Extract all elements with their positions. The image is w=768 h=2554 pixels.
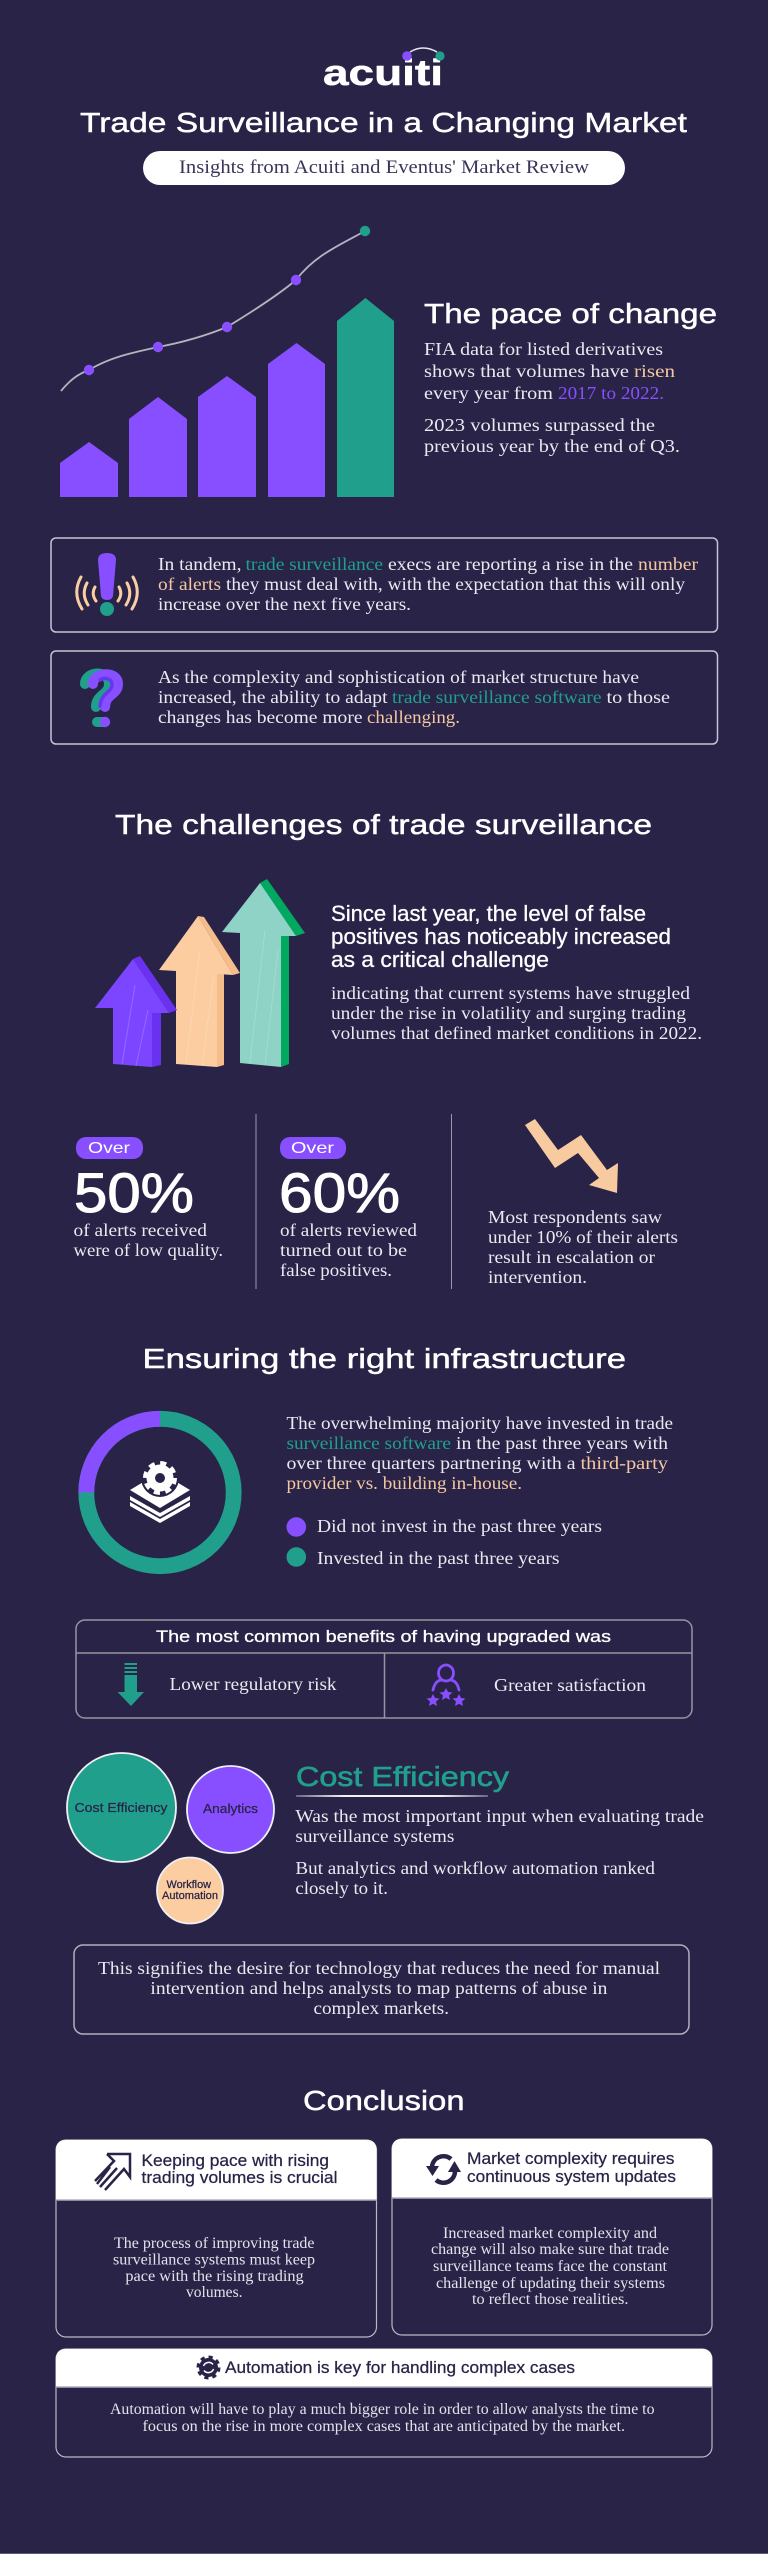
text block: cost efficiency detail: But analytics and workflow automation ranked — [295, 1858, 655, 1878]
card heading — [467, 2149, 676, 2186]
bubble: workflow automation: Automation — [162, 1890, 218, 1902]
card heading: Keeping pace with rising — [142, 2151, 329, 2170]
text block: invested in software — [286, 1413, 673, 1493]
card text: surveillance systems must keep — [113, 2252, 315, 2268]
legend: Did not invest in the past three years — [317, 1516, 602, 1536]
icon: zigzag down arrow — [525, 1119, 618, 1193]
subtitle pill: Insights from Acuiti and Eventus' Market Review — [179, 157, 589, 178]
callout heading: false positives: Since last year, the level of false — [331, 901, 646, 926]
text block: current systems struggled: under the rise in volatility and surging trading — [331, 1003, 686, 1023]
stat: over 60% — [279, 1137, 417, 1280]
panel: most common benefits — [76, 1620, 692, 1718]
title: Trade Surveillance in a Changing Market — [80, 107, 687, 138]
icon: upward arrow with stripes — [95, 2154, 130, 2190]
bubble: analytics: Analytics — [203, 1801, 259, 1816]
logo: acuiti: acuiti — [323, 52, 443, 93]
card heading: continuous system updates — [467, 2167, 676, 2186]
icon: automation gear — [198, 2357, 219, 2378]
stat: over 50% — [74, 1137, 223, 1260]
text: alerts: of alerts — [158, 574, 221, 594]
text block: FIA data — [424, 339, 675, 403]
text: alerts — [158, 554, 698, 614]
card text: volumes. — [186, 2284, 242, 2301]
text: most respondents: result in escalation or — [488, 1247, 655, 1267]
heading: the challenges of trade surveillance: The challenges of trade surveillance — [115, 809, 652, 840]
card heading — [142, 2151, 338, 2187]
heading: ensuring the right infrastructure: Ensuring the right infrastructure — [142, 1343, 626, 1374]
text block: invested in software: surveillance software — [286, 1433, 451, 1453]
text block: FIA data: every year from — [424, 383, 553, 403]
bubbles: evaluation inputs — [67, 1753, 274, 1924]
stat: over 60%: false positives. — [280, 1260, 392, 1280]
icon: person with stars — [426, 1665, 466, 1706]
text block: 2023 volumes — [424, 415, 680, 456]
panel: technology desire: This signifies the desire for technology that reduces the need for manual — [98, 1958, 660, 1978]
subtitle pill — [143, 151, 625, 185]
text: alerts: number — [638, 554, 698, 574]
card text: focus on the rise in more complex cases that are anticipated by the market. — [142, 2418, 625, 2435]
text block: cost efficiency detail: surveillance systems — [295, 1826, 454, 1846]
text block: FIA data: risen — [634, 361, 675, 381]
text: complexity: increased, the ability to adapt — [158, 687, 388, 707]
panel: market complexity — [51, 651, 718, 744]
bubble: analytics — [187, 1766, 274, 1853]
text: alerts: In tandem, — [158, 554, 242, 574]
card: automation — [56, 2349, 712, 2457]
card text: pace with the rising trading — [125, 2268, 304, 2285]
panel: technology desire: intervention and helps analysts to map patterns of abuse in — [150, 1978, 607, 1998]
text: complexity: As the complexity and sophistication of market structure have — [158, 667, 639, 687]
panel: rise in alerts — [51, 538, 718, 632]
heading: the pace of change: The pace of change — [424, 298, 717, 329]
text block: FIA data: FIA data for listed derivatives — [424, 339, 663, 359]
card text: change will also make sure that trade — [431, 2241, 669, 2258]
text: alerts: increase over the next five years. — [158, 594, 411, 614]
text: alerts: they must deal with, with the expectation that this will only — [226, 574, 685, 594]
benefit: lower regulatory risk: Lower regulatory risk — [170, 1674, 336, 1694]
callout heading: false positives — [331, 901, 671, 972]
panel: technology desire — [74, 1945, 689, 2034]
card text: Increased market complexity and — [443, 2225, 657, 2242]
stat: over 60%: 60% — [279, 1161, 400, 1224]
text block: current systems struggled: volumes that defined market conditions in 2022. — [331, 1023, 702, 1043]
text: complexity: changes has become more — [158, 707, 363, 727]
callout heading: false positives: positives has noticeably increased — [331, 924, 671, 949]
card: keeping pace — [56, 2140, 376, 2337]
stat: over 60%: Over — [291, 1140, 335, 1157]
text: alerts: trade surveillance — [246, 554, 383, 574]
text: most respondents: intervention. — [488, 1267, 587, 1287]
text: most respondents: under 10% of their alerts — [488, 1227, 678, 1247]
text: complexity: to those — [606, 687, 670, 707]
card heading: Market complexity requires — [467, 2149, 674, 2168]
text block: 2023 volumes: 2023 volumes surpassed the — [424, 415, 655, 435]
card heading: Automation is key for handling complex cases — [225, 2358, 575, 2377]
callout heading: false positives: as a critical challenge — [331, 947, 549, 972]
heading: cost efficiency: Cost Efficiency — [296, 1761, 509, 1792]
benefit: greater satisfaction: Greater satisfaction — [494, 1675, 646, 1695]
panel: technology desire: complex markets. — [314, 1998, 449, 2018]
text block: invested in software: third-party — [580, 1453, 668, 1473]
stat: over 50%: Over — [88, 1140, 131, 1157]
text block: invested in software: over three quarters partnering with a — [286, 1453, 576, 1473]
card text: Automation will have to play a much bigger role in order to allow analysts the time to — [110, 2401, 655, 2418]
card text — [431, 2225, 669, 2308]
icon: exclamation alert — [77, 553, 137, 616]
donut chart: invested share — [86, 1419, 234, 1566]
bubble: workflow automation — [157, 1858, 223, 1924]
icon: refresh arrows — [426, 2156, 461, 2183]
stat: over 60%: turned out to be — [280, 1240, 407, 1260]
bubble: cost efficiency: Cost Efficiency — [74, 1800, 168, 1815]
icon: three rising 3D arrows — [95, 879, 305, 1067]
card heading: trading volumes is crucial — [142, 2168, 338, 2187]
text: most respondents: Most respondents saw — [488, 1207, 662, 1227]
stat: under 10% escalation — [488, 1119, 678, 1287]
text: complexity: trade surveillance software — [392, 687, 602, 707]
text: alerts: execs are reporting a rise in the — [388, 554, 633, 574]
text: complexity — [158, 667, 670, 727]
text block: invested in software: provider vs. building in-house. — [286, 1473, 522, 1493]
card: market complexity — [392, 2139, 712, 2335]
text: most respondents — [488, 1207, 678, 1287]
text block: FIA data: shows that volumes have — [424, 361, 629, 381]
stat: over 50%: were of low quality. — [74, 1240, 223, 1260]
card text: challenge of updating their systems — [436, 2275, 665, 2292]
chart: rising volumes arrow bars with trend line — [60, 226, 394, 497]
icon: gear and layers — [130, 1459, 190, 1523]
stat: over 50%: of alerts received — [74, 1220, 207, 1240]
text block: current systems struggled: indicating that current systems have struggled — [331, 983, 690, 1003]
text block: invested in software: in the past three years with — [456, 1433, 668, 1453]
bubble: workflow automation: Workflow — [166, 1879, 211, 1891]
text block: current systems struggled — [331, 983, 702, 1043]
legend — [286, 1516, 602, 1568]
panel heading: The most common benefits of having upgraded was — [156, 1627, 611, 1646]
text block: cost efficiency detail: Was the most important input when evaluating trade — [295, 1806, 704, 1826]
text block: invested in software: The overwhelming majority have invested in trade — [286, 1413, 673, 1433]
icon: down arrow — [118, 1663, 144, 1706]
icon: question mark — [85, 673, 118, 727]
stat: over 50%: 50% — [74, 1161, 194, 1224]
card text — [110, 2401, 655, 2435]
text block: FIA data: 2017 to 2022. — [558, 383, 664, 403]
card text: The process of improving trade — [114, 2235, 315, 2252]
text block: cost efficiency detail: closely to it. — [295, 1878, 388, 1898]
bubble: cost efficiency — [67, 1753, 176, 1862]
card text: surveillance teams face the constant — [433, 2258, 668, 2275]
heading: conclusion: Conclusion — [303, 2085, 464, 2116]
text: complexity: challenging. — [367, 707, 460, 727]
stat: over 60%: of alerts reviewed — [280, 1220, 417, 1240]
text block: 2023 volumes: previous year by the end of Q3. — [424, 436, 680, 456]
card text — [113, 2235, 315, 2301]
legend: Invested in the past three years — [317, 1548, 560, 1568]
text block: cost efficiency detail — [295, 1806, 704, 1898]
card text: to reflect those realities. — [472, 2291, 628, 2308]
